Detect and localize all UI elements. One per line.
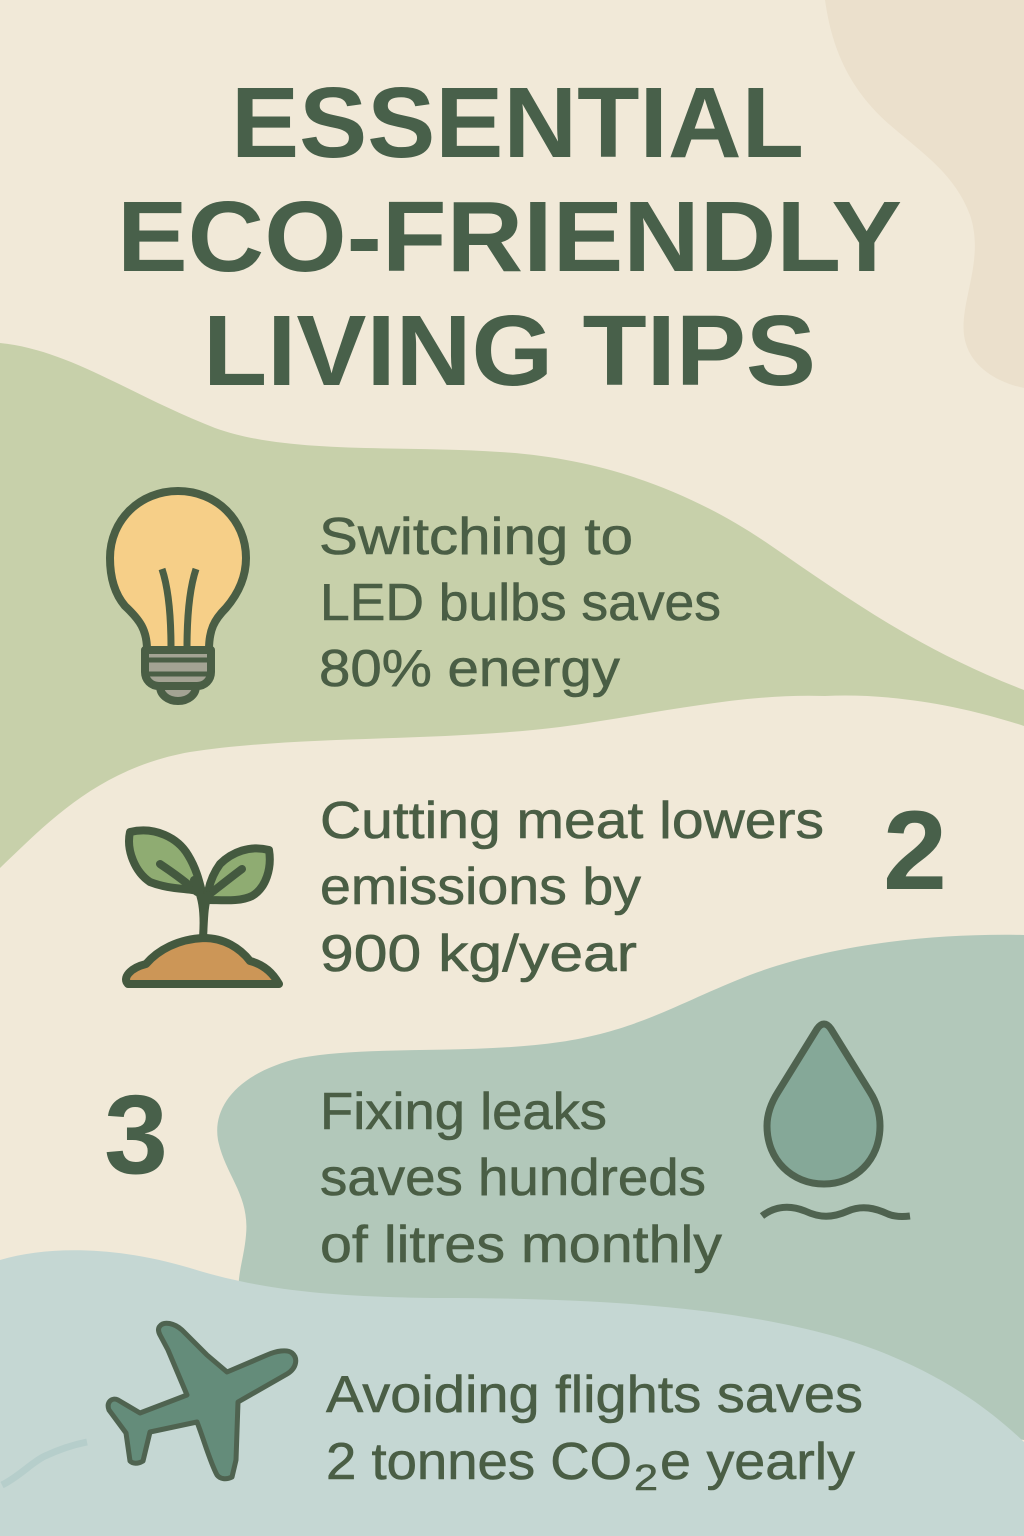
tip 2 text: Cutting meat lowers bbox=[320, 792, 824, 850]
number 2: 2 bbox=[883, 788, 947, 913]
tip 3 text bbox=[320, 1083, 722, 1274]
tip 1 text: LED bulbs saves bbox=[320, 574, 721, 632]
tip 4 text bbox=[326, 1366, 863, 1498]
tip 1 text: 80% energy bbox=[319, 640, 620, 698]
icon: seedling bbox=[126, 830, 279, 984]
tip 4 text: 2 bbox=[634, 1457, 658, 1498]
tip 4 text: e yearly bbox=[660, 1433, 855, 1491]
tip 1 text bbox=[319, 508, 721, 698]
tip 3 text: Fixing leaks bbox=[320, 1083, 607, 1141]
icon: water drop bbox=[762, 1024, 910, 1217]
background blob: teal band bbox=[217, 935, 1024, 1440]
flight trail bbox=[2, 1442, 87, 1485]
tip 2 text: emissions by bbox=[320, 858, 641, 916]
title: LIVING TIPS bbox=[203, 295, 816, 407]
tip 2 text bbox=[320, 792, 824, 983]
background blob: pale blue band bbox=[0, 1250, 1024, 1536]
background blob: top right bbox=[825, 0, 1024, 388]
background blob: green band bbox=[0, 343, 1024, 868]
icon: light bulb bbox=[110, 491, 246, 701]
icon: airplane bbox=[108, 1323, 296, 1479]
tip 3 text: of litres monthly bbox=[320, 1216, 722, 1274]
number 3: 3 bbox=[104, 1072, 168, 1197]
title: ECO-FRIENDLY bbox=[117, 181, 902, 293]
tip 3 text: saves hundreds bbox=[320, 1149, 706, 1207]
tip 1 text: Switching to bbox=[319, 508, 633, 566]
tip 4 text: 2 tonnes CO bbox=[326, 1433, 632, 1491]
title bbox=[117, 67, 902, 407]
tip 4 text: Avoiding flights saves bbox=[326, 1366, 863, 1424]
title: ESSENTIAL bbox=[231, 67, 804, 179]
tip 2 text: 900 kg/year bbox=[320, 925, 637, 983]
